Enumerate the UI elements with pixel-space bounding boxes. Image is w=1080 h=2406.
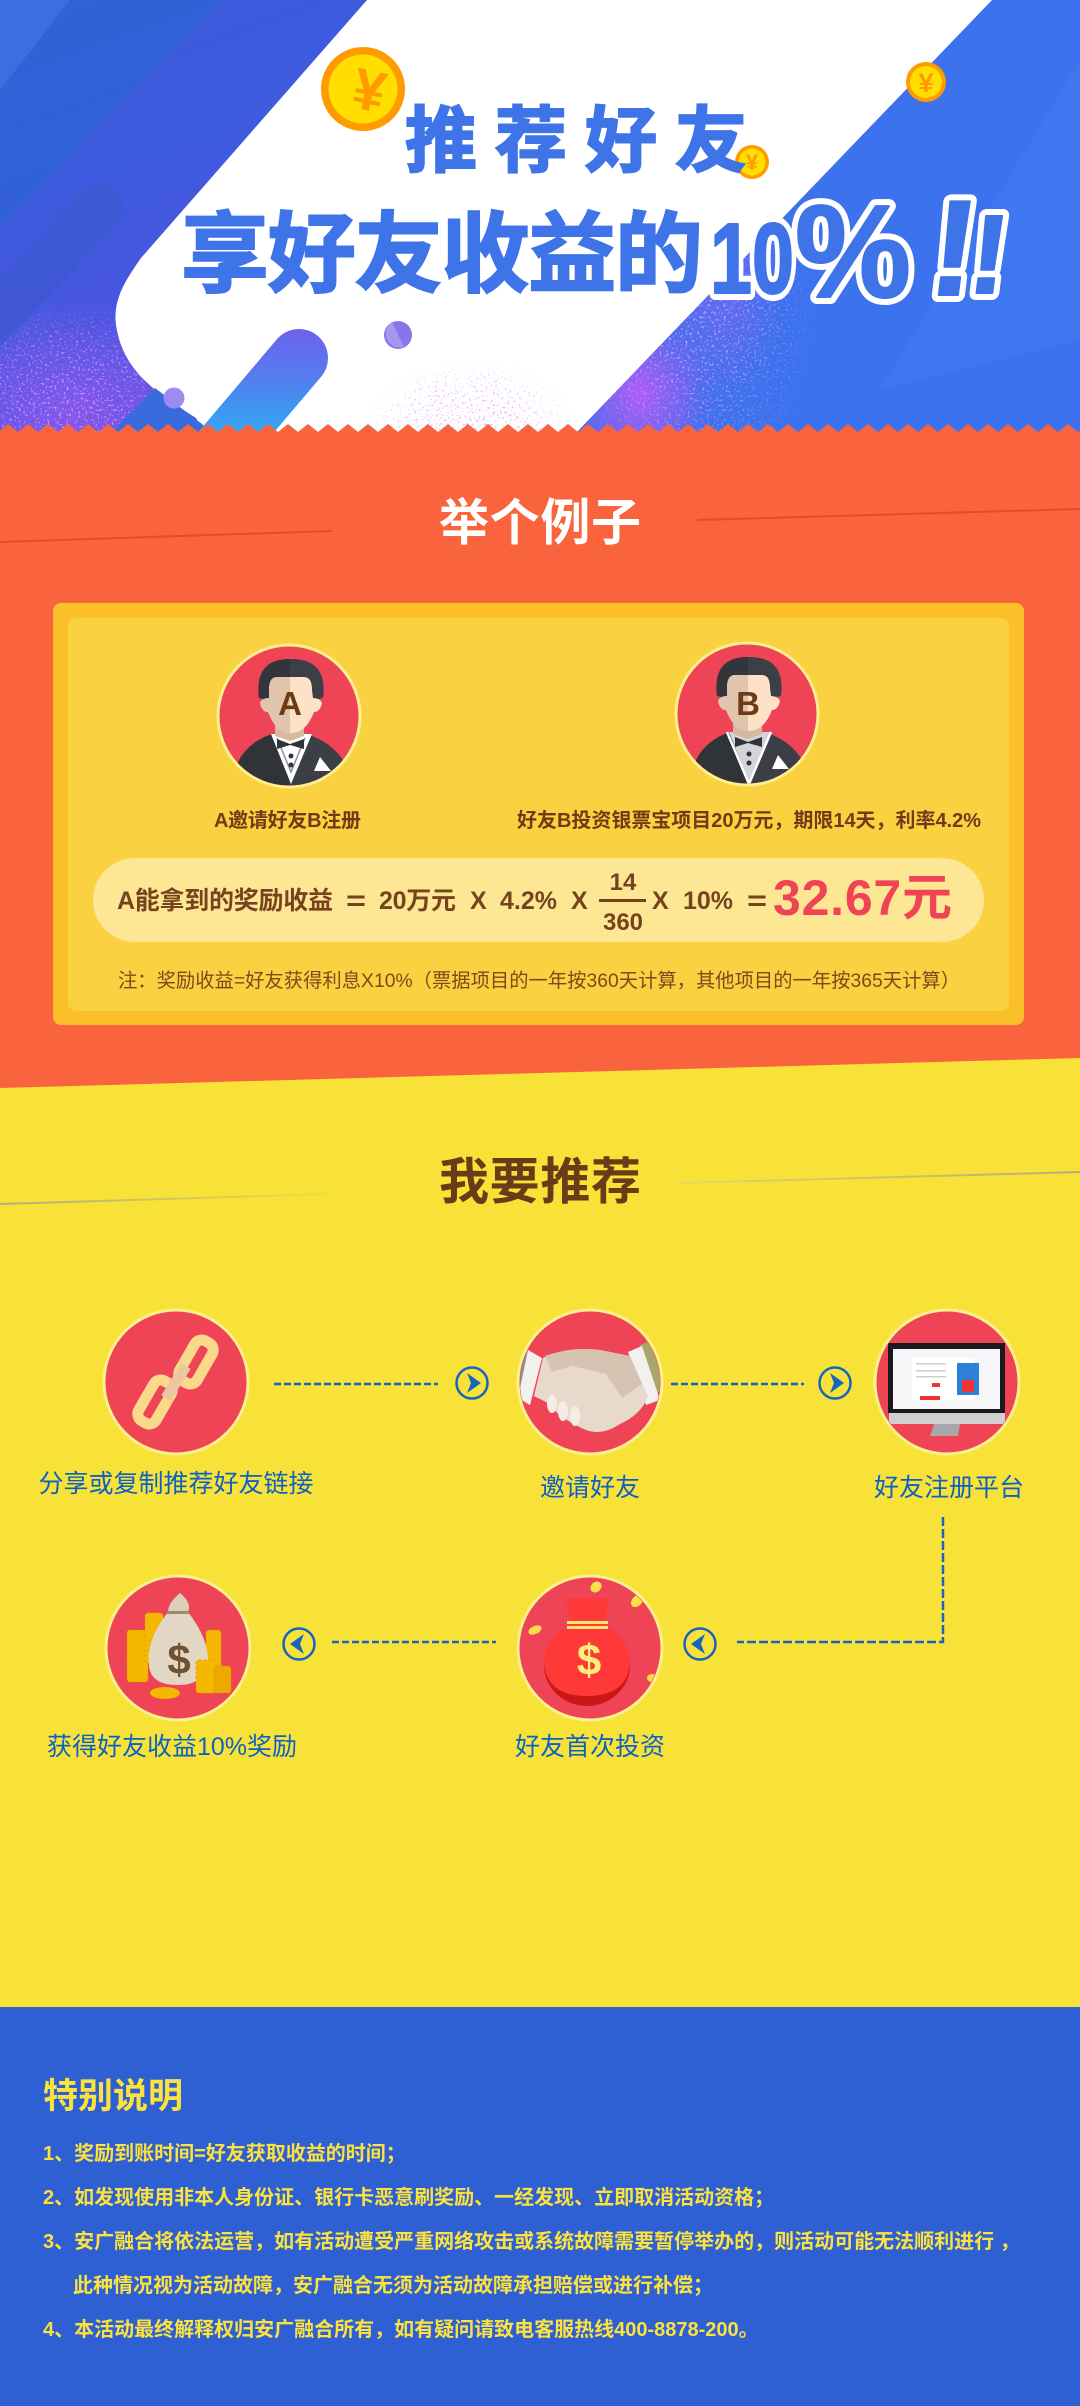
note 3 line 2: 此种情况视为活动故障，安广融合无须为活动故障承担赔偿或进行补偿； bbox=[73, 2273, 713, 2297]
title line 2 bbox=[181, 171, 1016, 325]
avatar A: A bbox=[278, 685, 302, 722]
notes list bbox=[43, 2142, 1020, 2341]
icon: large coin: ¥ bbox=[347, 56, 392, 126]
hero banner background bbox=[0, 0, 1080, 432]
percentage fill layer: % bbox=[795, 178, 911, 325]
icon: chain link bbox=[135, 1337, 216, 1427]
icon: small coin near title bbox=[735, 145, 769, 179]
percentage fill layer: ! bbox=[922, 171, 986, 324]
step 2: invite friend bbox=[512, 1310, 664, 1502]
icon: small coin near title: ¥ bbox=[746, 150, 759, 175]
percentage outline layer: % bbox=[795, 178, 911, 325]
formula pill: 32.67元 bbox=[773, 870, 952, 926]
formula pill: X bbox=[652, 887, 669, 915]
icon: handshake bbox=[520, 1342, 660, 1432]
white diagonal panel bbox=[115, 0, 992, 434]
step 1: share link bbox=[38, 1310, 314, 1498]
step 2: invite friend: 邀请好友 bbox=[540, 1474, 640, 1502]
title line 2: 享好友收益的 bbox=[181, 205, 703, 304]
avatar A bbox=[218, 645, 360, 800]
icon: top right coin: ¥ bbox=[918, 68, 934, 98]
formula pill: X bbox=[571, 887, 588, 915]
formula pill: 4.2% bbox=[500, 887, 557, 915]
panel: example card bbox=[53, 603, 1024, 1025]
formula pill: 20万元 bbox=[379, 887, 456, 915]
step 5: reward: 获得好友收益10%奖励 bbox=[47, 1733, 297, 1761]
note 2: 2、如发现使用非本人身份证、银行卡恶意刷奖励、一经发现、立即取消活动资格； bbox=[43, 2185, 774, 2209]
formula pill: = bbox=[346, 885, 366, 916]
formula pill: 360 bbox=[603, 909, 643, 936]
decorative rule right yellow bbox=[680, 1172, 1080, 1183]
formula pill: A能拿到的奖励收益 bbox=[117, 886, 333, 915]
arrow: step 4 to 5 bbox=[284, 1628, 496, 1660]
blue triangle bbox=[114, 388, 204, 432]
decorative rule left bbox=[0, 531, 332, 542]
note 1: 1、奖励到账时间=好友获取收益的时间； bbox=[43, 2142, 406, 2165]
purple speckles on white bbox=[369, 362, 571, 432]
heading: recommend: 我要推荐 bbox=[439, 1154, 641, 1210]
blue section bbox=[0, 2007, 1080, 2406]
label B: 好友B投资银票宝项目20万元，期限14天，利率4.2% bbox=[517, 808, 981, 832]
decorative rule right bbox=[697, 509, 1080, 520]
gradient capsule bbox=[199, 358, 299, 476]
percentage fill layer: 10 bbox=[710, 203, 794, 315]
note 4: 4、本活动最终解释权归安广融合所有，如有疑问请致电客服热线400-8878-200。 bbox=[43, 2317, 759, 2341]
icon: red bag bbox=[527, 1579, 657, 1706]
icon: money bag with coins: $ bbox=[167, 1636, 191, 1683]
title line 1: 推荐好友 bbox=[405, 102, 747, 182]
footnote: 注：奖励收益=好友获得利息X10%（票据项目的一年按360天计算，其他项目的一年按365天计算） bbox=[118, 970, 960, 992]
percentage outline layer: ! bbox=[963, 191, 1016, 317]
purple dot large bbox=[384, 321, 412, 349]
step 3: register platform: 好友注册平台 bbox=[874, 1474, 1024, 1502]
percentage outline layer: 10 bbox=[710, 203, 794, 315]
avatar B bbox=[676, 643, 818, 798]
heading: example: 举个例子 bbox=[439, 495, 641, 551]
decorative rule left yellow bbox=[0, 1193, 360, 1204]
percentage outline layer: ! bbox=[922, 171, 986, 324]
percentage outline layer bbox=[710, 171, 1016, 325]
icon: monitor bbox=[888, 1343, 1005, 1436]
purple dot small bbox=[164, 388, 184, 408]
label A: A邀请好友B注册 bbox=[214, 809, 361, 832]
avatar B: B bbox=[736, 685, 760, 722]
dark capsule decoration bbox=[0, 208, 100, 325]
icon: red bag: $ bbox=[577, 1636, 601, 1685]
formula pill: 14 bbox=[610, 869, 637, 896]
formula pill bbox=[93, 858, 984, 942]
step 1: share link: 分享或复制推荐好友链接 bbox=[38, 1470, 314, 1498]
arrow: step 2 to 3 bbox=[671, 1368, 850, 1398]
icon: money bag with coins bbox=[127, 1593, 231, 1699]
percentage fill layer: ! bbox=[963, 191, 1016, 317]
formula pill: = bbox=[747, 885, 767, 916]
note 3 line 1: 3、安广融合将依法运营，如有活动遭受严重网络攻击或系统故障需要暂停举办的，则活动可能无法顺利进行 ， bbox=[43, 2229, 1020, 2253]
formula pill: X bbox=[470, 887, 487, 915]
icon: large coin bbox=[321, 47, 405, 131]
step 3: register platform bbox=[874, 1310, 1024, 1502]
yellow section bbox=[0, 1058, 1080, 2007]
arrow: step 1 to 2 bbox=[274, 1368, 488, 1398]
arrow: step 3 to 4 bbox=[684, 1517, 943, 1660]
step 4: first investment bbox=[515, 1576, 665, 1761]
orange section bbox=[0, 424, 1080, 1092]
percentage fill layer bbox=[710, 171, 1016, 325]
formula pill: 10% bbox=[683, 887, 733, 915]
icon: top right coin bbox=[906, 62, 946, 102]
heading: special notes: 特别说明 bbox=[43, 2077, 183, 2116]
step 4: first investment: 好友首次投资 bbox=[515, 1733, 665, 1761]
step 5: reward bbox=[47, 1576, 297, 1761]
